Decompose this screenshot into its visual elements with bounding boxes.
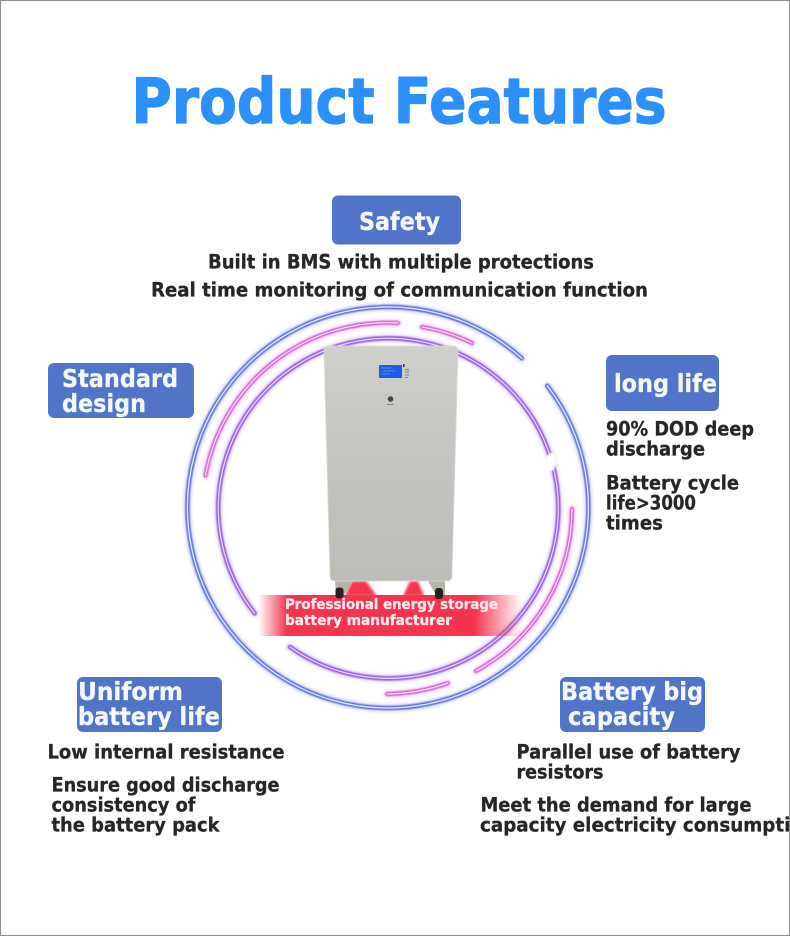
capacity badge	[560, 677, 705, 732]
lcd screen	[379, 364, 409, 378]
battery cabinet	[324, 346, 458, 599]
safety description: Built in BMS with multiple protections	[208, 250, 594, 274]
long life description: discharge	[606, 438, 705, 460]
safety description	[151, 250, 648, 302]
long life description: times	[606, 512, 663, 534]
panel: uniform battery life	[48, 677, 284, 836]
red glow under cabinet	[345, 581, 424, 596]
uniform description: Low internal resistance	[48, 740, 284, 764]
outer blue ring	[187, 307, 588, 708]
uniform badge: battery life	[78, 702, 220, 731]
long life badge: long life	[614, 369, 717, 398]
manufacturer banner band	[258, 595, 522, 636]
uniform description: Ensure good discharge	[52, 774, 280, 796]
uniform description: consistency of	[52, 794, 196, 816]
capacity description	[480, 740, 790, 836]
capacity description: Meet the demand for large	[480, 794, 752, 816]
uniform description: the battery pack	[52, 814, 220, 836]
pink arcs	[206, 323, 572, 694]
capacity description: resistors	[516, 760, 604, 784]
uniform badge	[77, 677, 222, 732]
cabinet body	[324, 346, 458, 581]
panel: standard design: design	[62, 389, 146, 418]
title: Product Features	[132, 65, 666, 138]
long life description	[606, 418, 754, 534]
panel: battery big capacity	[480, 677, 790, 836]
ring highlight spot	[546, 453, 556, 471]
purple ring	[218, 338, 558, 678]
right border line	[789, 0, 790, 936]
panel: safety	[151, 196, 648, 302]
panel: standard design	[48, 363, 194, 418]
long life description: 90% DOD deep	[606, 418, 754, 440]
capacity badge: capacity	[568, 702, 675, 731]
manufacturer banner text	[285, 597, 498, 629]
panel: long life	[606, 355, 754, 534]
logo	[387, 396, 394, 404]
neon rings	[187, 307, 588, 708]
uniform description	[48, 740, 284, 836]
capacity badge: Battery big	[561, 677, 703, 706]
manufacturer banner text: Professional energy storage	[285, 597, 498, 613]
uniform badge: Uniform	[78, 677, 183, 706]
safety description: Real time monitoring of communication function	[151, 278, 648, 302]
panel: standard design: Standard	[62, 364, 178, 393]
wheels	[335, 581, 445, 599]
capacity description: Parallel use of battery	[516, 740, 741, 764]
long life description: life>3000	[606, 492, 696, 514]
long life badge	[606, 355, 719, 411]
safety badge: Safety	[359, 207, 440, 236]
safety badge	[332, 196, 461, 244]
long life description: Battery cycle	[606, 472, 739, 494]
manufacturer banner text: battery manufacturer	[285, 613, 453, 629]
